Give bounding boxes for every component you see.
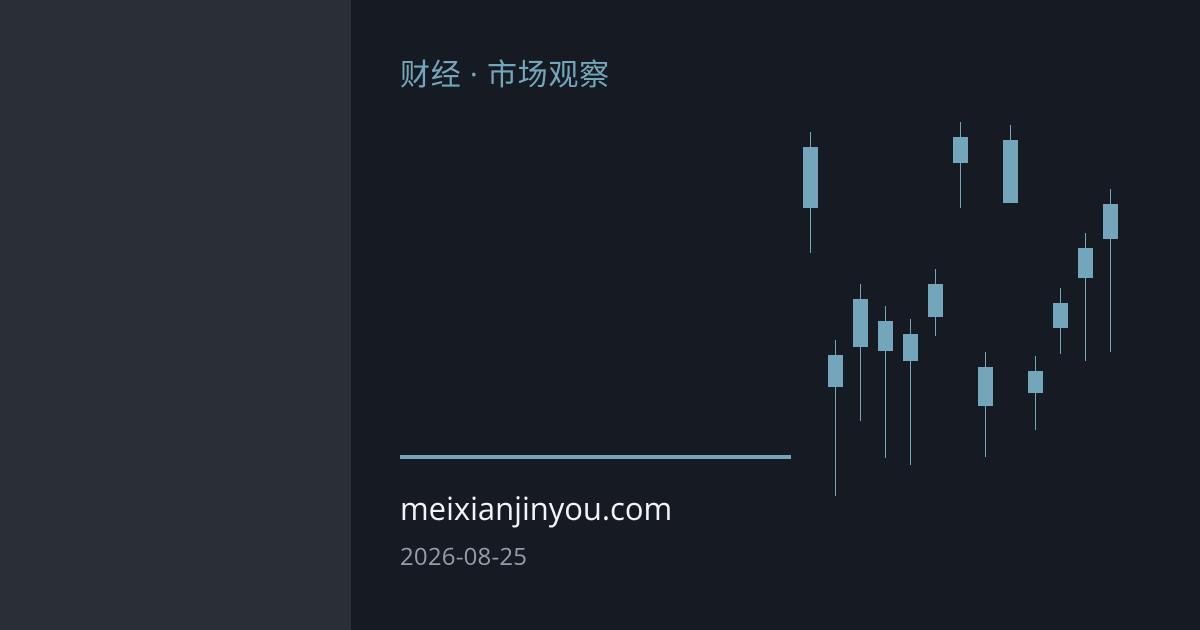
- accent rule: [400, 455, 791, 459]
- heading: category title: 财经 · 市场观察: [400, 53, 610, 94]
- panel: left sidebar: [0, 0, 351, 630]
- domain name: meixianjinyou.com: [400, 487, 672, 530]
- date: 2026-08-25: [400, 540, 527, 573]
